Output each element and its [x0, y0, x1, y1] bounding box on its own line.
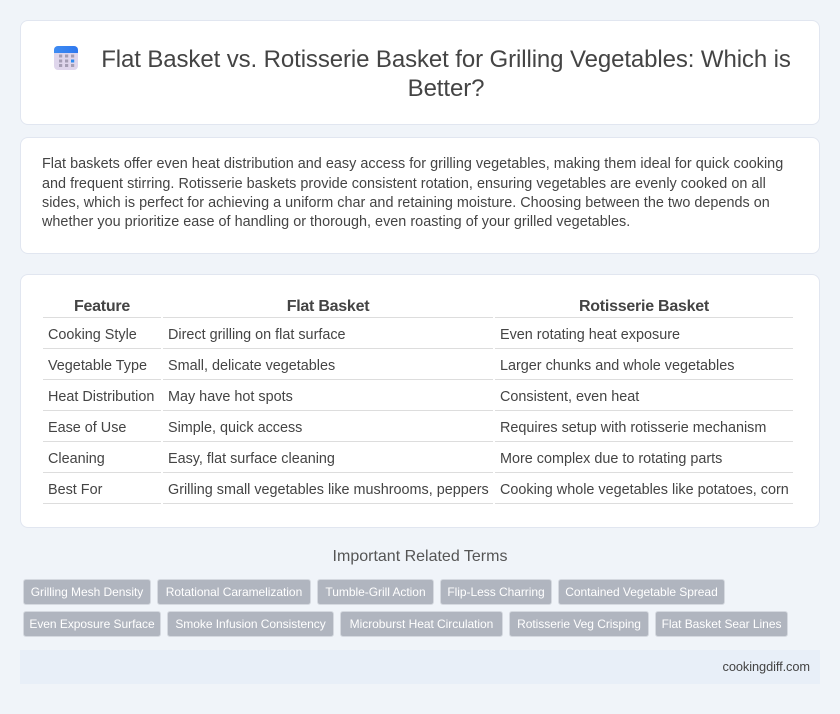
table row: vegetable type: Larger chunks and whole vegetables	[500, 358, 734, 374]
table row: cleaning	[48, 451, 722, 467]
tag: Tumble-Grill Action	[325, 585, 426, 599]
table row: ease of use: Requires setup with rotisserie mechanism	[500, 420, 766, 436]
text block: intro: Flat baskets offer even heat distribution and easy access for grilling vegetables, making them ideal for quick cooking	[42, 156, 783, 172]
text block: intro	[42, 156, 783, 230]
table row: best for: Grilling small vegetables like mushrooms, peppers	[168, 482, 489, 498]
table row: cooking style	[48, 327, 680, 343]
tag	[340, 611, 503, 637]
heading: related terms: Important Related Terms	[333, 548, 507, 565]
tag: Contained Vegetable Spread	[565, 585, 718, 599]
tag: Rotational Caramelization	[166, 585, 302, 599]
panel: intro paragraph	[20, 137, 820, 254]
table row: heat distribution: Consistent, even heat	[500, 389, 639, 405]
tag	[23, 611, 161, 637]
footer bar	[20, 650, 820, 684]
table header: Feature	[74, 298, 130, 315]
tag: Flip-Less Charring	[447, 585, 545, 599]
table row: cooking style: Even rotating heat exposure	[500, 327, 680, 343]
tag	[317, 579, 434, 605]
tag	[167, 611, 334, 637]
tag	[558, 579, 725, 605]
tag: Microburst Heat Circulation	[350, 617, 493, 631]
tag: Smoke Infusion Consistency	[175, 617, 326, 631]
table header	[74, 298, 709, 315]
table row: vegetable type: Small, delicate vegetables	[168, 358, 335, 374]
table row: cooking style: Direct grilling on flat surface	[168, 327, 346, 343]
table row: cooking style: Cooking Style	[48, 327, 137, 343]
tag	[440, 579, 552, 605]
table row: vegetable type	[48, 358, 734, 374]
text block: intro: sides, which is perfect for achieving a uniform char and retaining moisture. Choosing between the two depends on	[42, 195, 770, 211]
footer source: cookingdiff.com	[723, 659, 810, 674]
table row: heat distribution: May have hot spots	[168, 389, 293, 405]
table row: cleaning: Easy, flat surface cleaning	[168, 451, 335, 467]
text block: intro: and frequent stirring. Rotisserie baskets provide consistent rotation, ensuring vegetables are evenly cooked on all	[42, 176, 766, 192]
table row: ease of use: Ease of Use	[48, 420, 126, 436]
tag group: related terms	[23, 579, 788, 637]
table row: best for	[48, 482, 789, 498]
icon: calendar	[54, 46, 78, 70]
table row: ease of use	[48, 420, 766, 436]
table row: vegetable type: Vegetable Type	[48, 358, 147, 374]
tag: Even Exposure Surface	[29, 617, 155, 631]
tag	[23, 579, 151, 605]
tag	[157, 579, 311, 605]
tag	[655, 611, 788, 637]
text block: intro: whether you prioritize ease of handling or thorough, even roasting of your grilled vegetables.	[42, 214, 630, 230]
title: Flat Basket vs. Rotisserie Basket for Grilling Vegetables: Which is Better?	[101, 46, 791, 102]
table header: Rotisserie Basket	[579, 298, 709, 315]
table row: best for: Cooking whole vegetables like potatoes, corn	[500, 482, 789, 498]
table row: ease of use: Simple, quick access	[168, 420, 302, 436]
table header: Flat Basket	[287, 298, 369, 315]
panel: title card	[20, 20, 820, 125]
table row: cleaning: Cleaning	[48, 451, 105, 467]
table row: cleaning: More complex due to rotating parts	[500, 451, 722, 467]
tag: Flat Basket Sear Lines	[662, 617, 781, 631]
tag	[509, 611, 649, 637]
panel: comparison table	[20, 274, 820, 528]
tag: Grilling Mesh Density	[31, 585, 143, 599]
table row: heat distribution	[48, 389, 640, 405]
table row: heat distribution: Heat Distribution	[48, 389, 154, 405]
table row: best for: Best For	[48, 482, 102, 498]
tag: Rotisserie Veg Crisping	[517, 617, 641, 631]
